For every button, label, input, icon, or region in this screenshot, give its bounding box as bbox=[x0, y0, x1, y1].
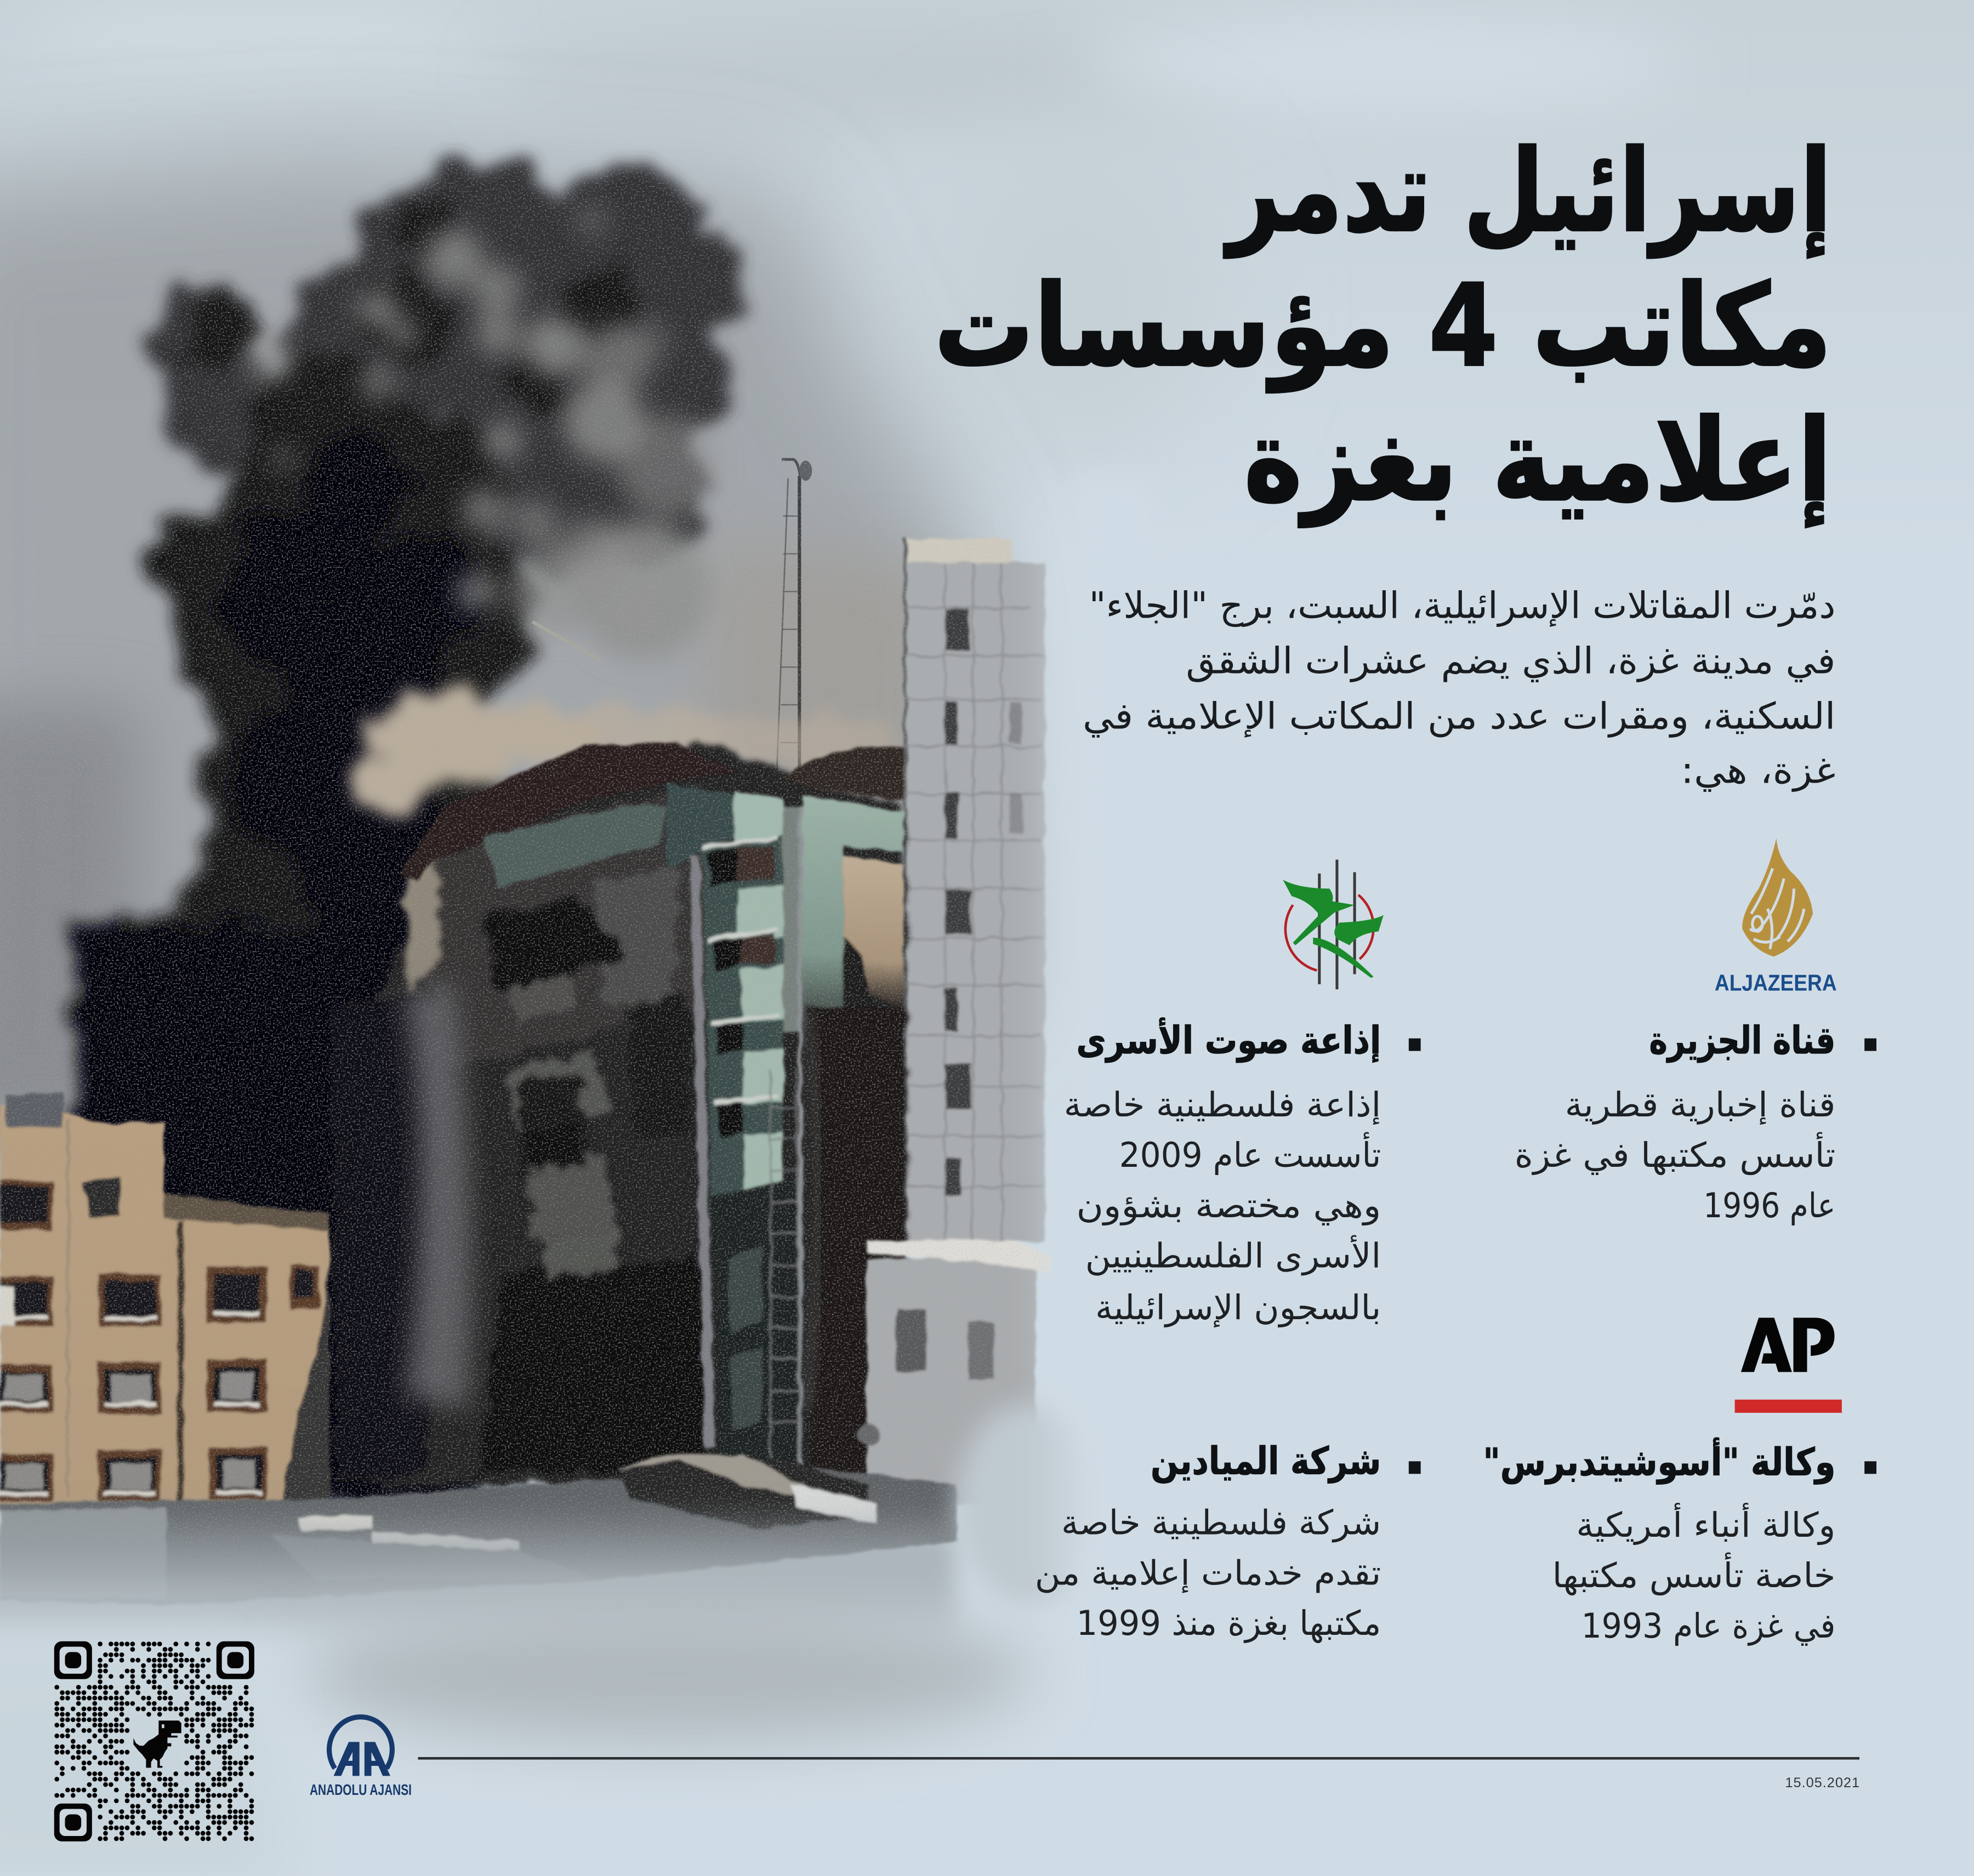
section: Al Jazeera channel: قناة إخبارية قطرية bbox=[1565, 1085, 1835, 1125]
soot streak on tower bbox=[403, 982, 473, 1410]
main destroyed tower bbox=[334, 743, 907, 1485]
logo: Al Jazeera bbox=[1715, 838, 1837, 995]
section: Al Mayadeen company: مكتبها بغزة منذ 1999 bbox=[1077, 1603, 1381, 1644]
balcony strip bbox=[702, 836, 783, 1214]
section: Al Jazeera channel: عام 1996 bbox=[1703, 1185, 1835, 1225]
section: Voice of Prisoners radio: إذاعة صوت الأسرى bbox=[1077, 1018, 1381, 1063]
section: Associated Press: خاصة تأسس مكتبها bbox=[1552, 1552, 1835, 1596]
tower body bbox=[334, 743, 907, 1485]
section: Al Jazeera channel: تأسس مكتبها في غزة bbox=[1515, 1132, 1835, 1176]
intro paragraph bbox=[1083, 584, 1835, 791]
dark teal panels under roof bbox=[483, 806, 667, 887]
logo: Anadolu Ajansi: ANADOLU AJANSI bbox=[310, 1781, 412, 1798]
section: Voice of Prisoners radio: بالسجون الإسرائيلية bbox=[1095, 1287, 1381, 1328]
logo: Al Jazeera: ALJAZEERA bbox=[1715, 970, 1837, 995]
bullet bbox=[1409, 1039, 1421, 1051]
lower-right grey building bbox=[857, 1240, 1051, 1504]
section: Associated Press bbox=[1483, 1438, 1876, 1646]
section: Al Mayadeen company: تقدم خدمات إعلامية من bbox=[1035, 1553, 1381, 1593]
section: Al Jazeera channel bbox=[1515, 1019, 1876, 1225]
intro paragraph: في مدينة غزة، الذي يضم عشرات الشقق bbox=[1186, 640, 1835, 683]
antenna mast bbox=[776, 459, 812, 806]
intro paragraph: السكنية، ومقرات عدد من المكاتب الإعلامية في bbox=[1083, 695, 1835, 738]
title: إسرائيل تدمر bbox=[1224, 125, 1831, 258]
logo: Associated Press bbox=[1735, 1318, 1842, 1413]
pale billows inside the smoke bbox=[248, 203, 718, 661]
title: مكاتب 4 مؤسسات bbox=[934, 260, 1831, 393]
QR code bbox=[54, 1641, 254, 1841]
right-hand grey building bbox=[904, 539, 1045, 1244]
left tan building bbox=[0, 1092, 330, 1510]
light teal facade bbox=[734, 790, 783, 846]
black smoke column bbox=[67, 157, 743, 1504]
photo: smoke and destroyed tower bbox=[0, 0, 1259, 1762]
QR dinosaur icon bbox=[133, 1720, 181, 1767]
bullet bbox=[1864, 1461, 1876, 1474]
beige dust cloud bbox=[352, 688, 888, 812]
section: Al Mayadeen company: شركة الميادين bbox=[1151, 1439, 1381, 1483]
section: Associated Press: في غزة عام 1993 bbox=[1581, 1606, 1835, 1646]
grey haze behind the smoke bbox=[0, 157, 1007, 1196]
bullet bbox=[1409, 1461, 1421, 1474]
footer rule bbox=[418, 1757, 1859, 1760]
section: Associated Press: وكالة أنباء أمريكية bbox=[1576, 1503, 1835, 1545]
section: Voice of Prisoners radio: إذاعة فلسطينية خاصة bbox=[1064, 1085, 1381, 1125]
bullet bbox=[1864, 1039, 1876, 1051]
section: Al Jazeera channel: قناة الجزيرة bbox=[1649, 1019, 1835, 1063]
logo: Voice of Prisoners radio bbox=[1283, 860, 1384, 989]
fade overlays bbox=[0, 478, 1152, 1876]
section: Al Mayadeen company: شركة فلسطينية خاصة bbox=[1061, 1502, 1381, 1542]
section: Associated Press: وكالة "أسوشيتدبرس" bbox=[1483, 1438, 1835, 1485]
intro paragraph: غزة، هي: bbox=[1681, 749, 1835, 791]
section: Voice of Prisoners radio: تأسست عام 2009 bbox=[1119, 1132, 1381, 1175]
rooftop debris at tower base bbox=[0, 1454, 957, 1605]
damaged floors bbox=[485, 869, 686, 1278]
burnt roof bbox=[399, 743, 907, 1485]
logo: Anadolu Ajansi bbox=[310, 1717, 412, 1798]
section: Voice of Prisoners radio: وهي مختصة بشؤون bbox=[1077, 1185, 1381, 1225]
section: Al Mayadeen company bbox=[1035, 1439, 1421, 1644]
lattice shaft bbox=[770, 1070, 801, 1460]
section: Voice of Prisoners radio bbox=[1064, 1018, 1421, 1328]
section: Voice of Prisoners radio: الأسرى الفلسطينيين bbox=[1085, 1235, 1381, 1276]
intro paragraph: دمّرت المقاتلات الإسرائيلية، السبت، برج "الجلاء" bbox=[1089, 584, 1835, 628]
title bbox=[934, 125, 1831, 528]
date: 15.05.2021 bbox=[1785, 1775, 1859, 1791]
debris shard bbox=[532, 621, 602, 661]
title: إعلامية بغزة bbox=[1244, 395, 1831, 528]
dark lower strip bbox=[712, 1177, 806, 1473]
